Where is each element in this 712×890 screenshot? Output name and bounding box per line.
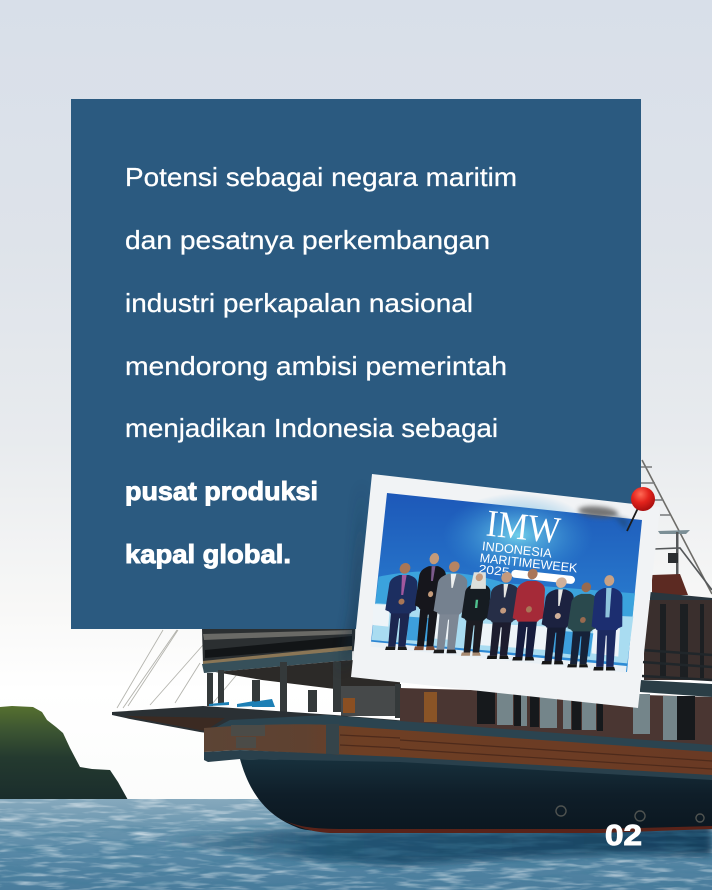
main statement: menjadikan Indonesia sebagai xyxy=(125,413,498,443)
main statement: industri perkapalan nasional xyxy=(125,288,473,318)
middle cabin wall xyxy=(400,688,712,746)
pin shadow xyxy=(578,505,628,530)
upper right ship structure and mast xyxy=(640,460,712,697)
person 8 xyxy=(563,582,601,667)
main statement: kapal global. xyxy=(125,539,291,569)
event logo: INDONESIA xyxy=(481,539,553,561)
main statement: pusat produksi xyxy=(125,476,318,506)
hull portholes xyxy=(556,806,704,822)
under-roof slats xyxy=(215,660,400,692)
person 1 xyxy=(381,563,421,650)
dark hull xyxy=(240,759,712,831)
event stage photo xyxy=(371,493,642,673)
overhanging stern deck xyxy=(112,706,420,733)
event logo: MARITIMEWEEK xyxy=(479,551,579,576)
person 2 xyxy=(410,553,449,650)
event logo xyxy=(478,502,584,586)
group of nine people xyxy=(381,553,625,670)
sea xyxy=(0,799,712,890)
teal lower rail xyxy=(204,750,712,781)
person 6 xyxy=(508,569,549,661)
cabin below deck xyxy=(341,686,401,716)
person 7 xyxy=(537,577,577,664)
person 3 xyxy=(429,561,471,653)
deck posts xyxy=(207,662,401,718)
main statement: mendorong ambisi pemerintah xyxy=(125,351,507,381)
island on the left xyxy=(0,706,128,800)
main statement: Potensi sebagai negara maritim xyxy=(125,162,517,192)
red push pin xyxy=(627,487,655,531)
ship xyxy=(112,629,712,833)
wooden hull band xyxy=(204,724,712,776)
stage scenery xyxy=(371,571,635,673)
upper balcony xyxy=(202,629,355,664)
person 5 xyxy=(483,572,523,659)
person 4 xyxy=(457,572,494,656)
main statement: dan pesatnya perkembangan xyxy=(125,225,490,255)
rigging lines xyxy=(117,630,270,708)
event logo: 2025 xyxy=(478,562,511,579)
event logo: IMW xyxy=(484,503,563,552)
page number: 02 xyxy=(605,820,642,852)
pinned photo xyxy=(340,474,660,708)
person 9 xyxy=(589,575,625,670)
blue cushions xyxy=(209,699,275,707)
cabin windows xyxy=(497,690,677,740)
main statement xyxy=(125,162,517,569)
photo frame xyxy=(351,474,660,708)
text panel xyxy=(71,99,641,629)
teal rail xyxy=(205,715,712,753)
